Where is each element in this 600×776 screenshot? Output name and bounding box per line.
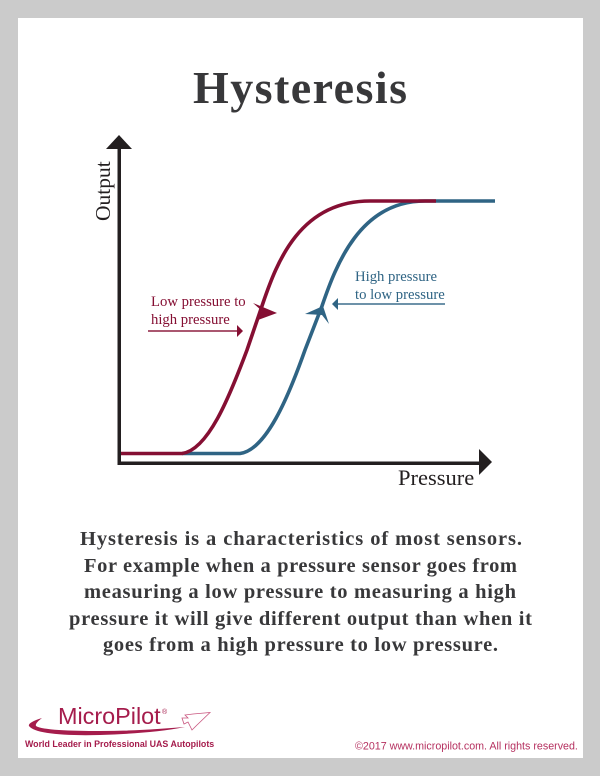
explanation text: pressure it will give different output than when it [69, 608, 532, 630]
logo wordmark: MicroPilot [58, 703, 161, 729]
logo registered mark: ® [162, 708, 168, 716]
copyright: ©2017 www.micropilot.com. All rights reserved. [355, 740, 578, 752]
explanation text: Hysteresis is a characteristics of most sensors. [80, 528, 522, 550]
logo plane icon [182, 712, 210, 730]
explanation text: For example when a pressure sensor goes from [84, 555, 517, 577]
explanation text: goes from a high pressure to low pressure. [103, 634, 498, 656]
direction marker: red arrowhead [253, 303, 277, 320]
arrow: blue pointer [332, 298, 445, 310]
label: high pressure to low pressure: High pressure [355, 269, 437, 285]
explanation text [69, 528, 532, 656]
chart [91, 135, 495, 490]
explanation text: measuring a low pressure to measuring a high [84, 581, 517, 603]
title: Hysteresis [193, 62, 407, 113]
label: high pressure to low pressure: to low pressure [355, 287, 445, 303]
logo: MicroPilot [25, 703, 214, 749]
y axis label: Output [91, 161, 115, 221]
label: low pressure to high pressure: Low pressure to [151, 294, 246, 310]
arrow: red pointer [148, 325, 243, 337]
direction marker: blue arrowhead [305, 306, 329, 324]
x axis with arrow [118, 449, 492, 475]
curve: high pressure to low pressure (blue) [182, 201, 495, 454]
x axis label: Pressure [398, 465, 474, 490]
curve: low pressure to high pressure (red) [120, 201, 436, 454]
logo swoosh [29, 718, 185, 735]
logo tagline: World Leader in Professional UAS Autopilots [25, 739, 214, 749]
y axis with arrow [106, 135, 132, 465]
label: low pressure to high pressure: high pressure [151, 312, 230, 328]
